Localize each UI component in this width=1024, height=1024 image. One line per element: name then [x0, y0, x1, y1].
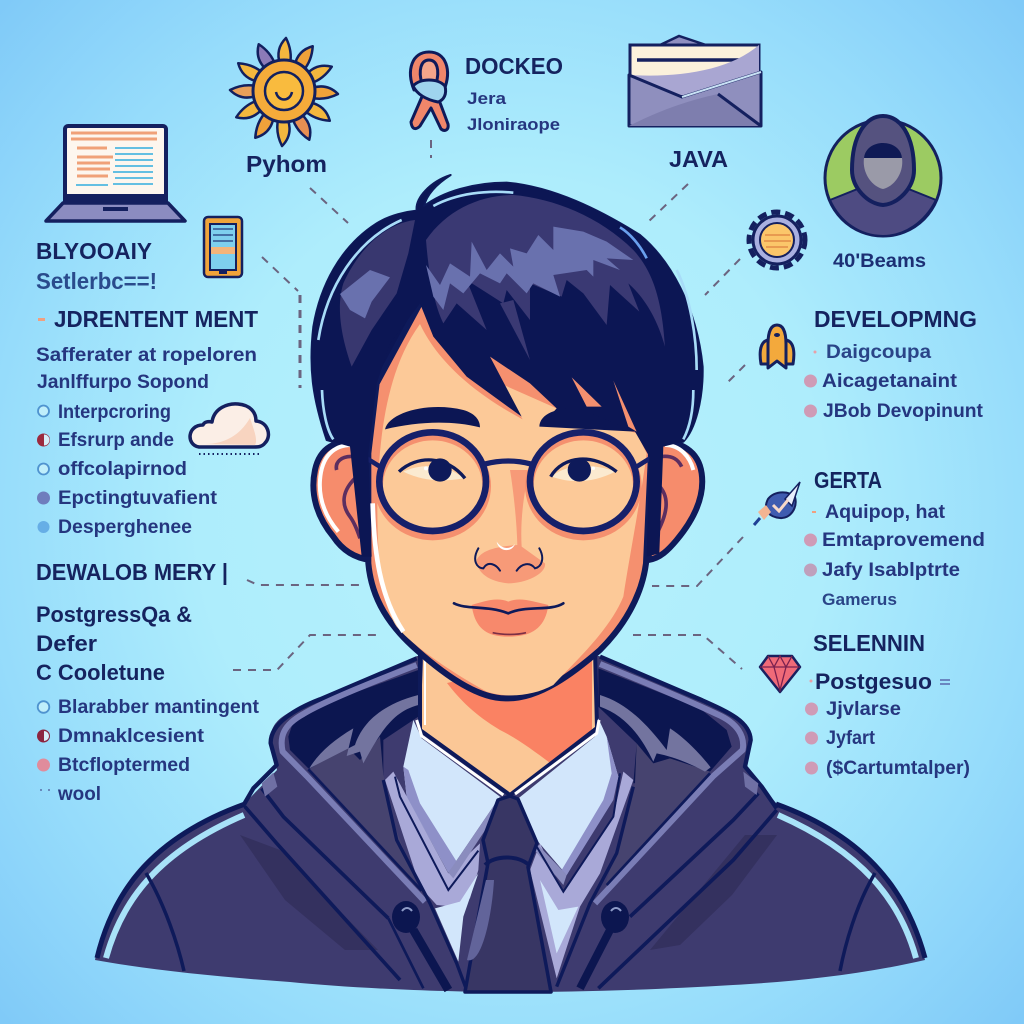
bullet list: Efsrurp ande	[58, 430, 174, 451]
panel: GERTA list: Aquipop, hat	[825, 502, 946, 523]
panel: left skills bottom	[36, 559, 260, 805]
face rim	[373, 503, 403, 632]
lens shadows	[379, 436, 637, 536]
label: JAVA: JAVA	[669, 146, 728, 172]
icon: ribbon	[410, 52, 448, 130]
panel: SELENNIN list: Postgesuo	[815, 669, 932, 694]
face base	[368, 303, 653, 698]
text block: Safferater at ropeloren	[36, 345, 257, 366]
face light	[377, 324, 647, 695]
icon: hooded figure	[825, 116, 941, 236]
portrait: jacket buttons	[392, 901, 629, 933]
panel: left skills top	[36, 238, 258, 538]
nose shade	[477, 470, 545, 583]
glasses	[367, 432, 650, 531]
panel: DEVELOPMNG list: Aicagetanaint	[822, 371, 958, 392]
bullet list: Interpcroring	[58, 402, 171, 423]
bullet list: Epctingtuvafient	[58, 488, 218, 509]
dash marker	[38, 318, 45, 321]
heading: DEWALOB MERY: DEWALOB MERY |	[36, 559, 228, 585]
panel: DEVELOPMNG list	[804, 306, 984, 422]
icon: cloud	[190, 404, 268, 454]
portrait: right hood	[580, 657, 777, 988]
icon: rocket badge	[760, 325, 794, 368]
top block: DOCKEO: Jera	[467, 89, 507, 108]
bullet list: Blarabber mantingent	[58, 697, 260, 718]
back hair	[311, 175, 703, 447]
icon: phone	[204, 217, 242, 277]
bullet list	[37, 697, 260, 805]
icon: check pin	[754, 482, 800, 525]
heading: DEVELOPMNG	[814, 306, 977, 332]
top block: DOCKEO: Jloniraope	[467, 115, 560, 134]
heading: JDRENTENT MENT: JDRENTENT MENT	[54, 306, 258, 332]
hair highlight	[426, 227, 633, 310]
portrait: tie	[465, 796, 551, 992]
panel: SELENNIN list: Jyfart	[826, 728, 876, 749]
bullet list: offcolapirnod	[58, 459, 187, 480]
text block: C Cooletune	[36, 660, 165, 685]
right ear	[648, 442, 702, 560]
dashed connector lines	[233, 140, 745, 670]
portrait: left collar	[383, 720, 505, 990]
mouth	[454, 600, 563, 637]
portrait: left hood	[243, 658, 448, 990]
hair left lobe	[340, 220, 415, 367]
portrait: head	[311, 175, 703, 698]
text block	[36, 345, 257, 393]
heading: GERTA	[814, 467, 882, 493]
text block	[36, 602, 192, 685]
portrait: right collar	[515, 718, 633, 990]
hair rim lights	[318, 192, 697, 439]
bullet list	[37, 402, 218, 538]
heading: BLYOOAIY: BLYOOAIY	[36, 238, 152, 264]
subheading: Settler: Setlerbc==!	[36, 268, 157, 294]
icon: diamond	[760, 656, 800, 692]
bullet list: wool	[57, 784, 101, 805]
panel: GERTA list: Emtaprovemend	[822, 530, 985, 551]
panel: DEVELOPMNG list: Daigcoupa	[826, 342, 931, 363]
right eyebrow	[539, 407, 635, 432]
icon: laptop	[46, 126, 185, 221]
panel: DEVELOPMNG list: JBob Devopinunt	[823, 401, 984, 422]
portrait: neck	[420, 640, 597, 795]
bullet list: Despergheneе	[58, 517, 192, 538]
text block: PostgressQa &	[36, 602, 192, 627]
panel: GERTA list: Gamerus	[822, 590, 897, 609]
icon: sun	[230, 38, 338, 146]
panel: GERTA list	[804, 467, 985, 609]
left eye	[399, 458, 465, 482]
panel: SELENNIN list: Jjvlarse	[826, 699, 901, 720]
left ear	[313, 441, 371, 560]
text block: Defer	[36, 631, 97, 656]
portrait: jacket body	[95, 656, 925, 992]
panel: SELENNIN list: ($Cartumtalper)	[826, 758, 970, 779]
panel: SELENNIN list	[805, 630, 970, 779]
front hair	[311, 183, 703, 557]
panel: GERTA list: Jafy Isablptrte	[822, 560, 960, 581]
bullet list: Btcfloptermed	[58, 755, 190, 776]
label: Pyhom: Pyhom	[246, 151, 327, 177]
icon: envelope	[629, 36, 761, 126]
label: 40 Beams: 40'Beams	[833, 251, 926, 272]
hair crown	[426, 195, 665, 347]
top block: DOCKEO	[465, 53, 563, 134]
heading: SELENNIN	[813, 630, 925, 656]
text block: Janlffurpo Sopond	[37, 372, 209, 393]
bullet list: Dmnaklcesient	[58, 726, 205, 747]
top block: DOCKEO: DOCKEO	[465, 53, 563, 79]
nose highlight	[497, 542, 515, 550]
left eyebrow	[385, 407, 480, 429]
right eye	[551, 458, 617, 482]
nose outline	[475, 548, 542, 571]
icon: gear	[749, 212, 805, 268]
